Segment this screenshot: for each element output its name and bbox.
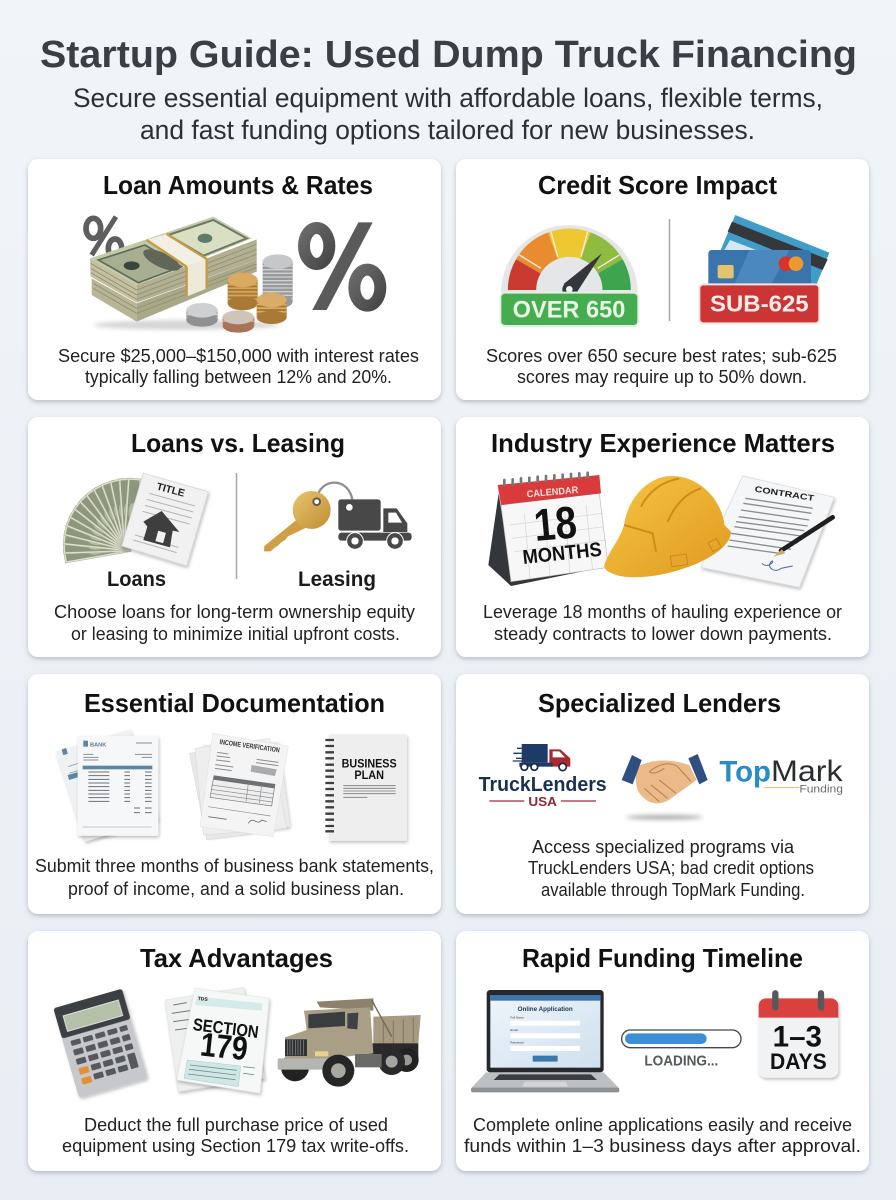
logo: TruckLenders USA: TruckLenders	[479, 774, 607, 796]
text: credit score: Scores over 650 secure best rates; sub-625	[486, 346, 837, 366]
icon: business plan notebook	[325, 734, 407, 841]
icon: business plan notebook: PLAN	[354, 769, 384, 782]
logo: TopMark Funding: Mark	[771, 755, 843, 788]
text: documentation: Submit three months of business bank statements,	[35, 856, 434, 876]
icon: loading bar: LOADING...	[644, 1054, 718, 1070]
subtitle: and fast funding options tailored for new businesses.	[140, 115, 755, 145]
title: Startup Guide: Used Dump Truck Financing	[40, 34, 857, 76]
panel: tax advantages	[28, 931, 441, 1171]
logo: TruckLenders USA: USA	[528, 794, 558, 809]
panel: loans vs leasing	[28, 417, 441, 657]
text: tax advantages: equipment using Section 179 tax write-offs.	[62, 1136, 409, 1156]
icon: laptop with online application: Password	[510, 1041, 524, 1045]
icon: calendar, hard hat and contract: MONTHS	[522, 539, 603, 569]
divider	[668, 219, 670, 321]
heading: loans vs leasing: Loans vs. Leasing	[131, 428, 345, 458]
text: credit score	[486, 346, 837, 387]
text: specialized lenders: TruckLenders USA; bad credit options	[528, 858, 814, 878]
heading: rapid funding: Rapid Funding Timeline	[522, 943, 803, 973]
text: loan amounts: typically falling between 12% and 20%.	[85, 367, 392, 387]
text: specialized lenders	[528, 837, 814, 900]
icon: calendar, hard hat and contract: CALENDAR	[526, 485, 579, 500]
text: specialized lenders: Access specialized programs via	[532, 837, 795, 857]
icon: calendar, hard hat and contract: CONTRACT	[754, 484, 815, 503]
logo: TopMark Funding: Funding	[799, 783, 843, 795]
text: loan amounts	[58, 346, 419, 387]
icon: cash fan and title document: TITLE	[155, 482, 186, 500]
icon: dump truck	[278, 998, 421, 1087]
icon: credit gauge	[500, 225, 638, 326]
text: loans vs leasing: or leasing to minimize initial upfront costs.	[71, 624, 400, 644]
label: leasing: Leasing	[298, 568, 376, 591]
icon: calendar, hard hat and contract: 18	[532, 496, 579, 551]
panel: industry experience	[456, 417, 869, 657]
icon: calendar, hard hat and contract	[488, 473, 834, 587]
icon: section 179 tax form	[165, 987, 269, 1093]
logo: TopMark Funding: Top	[719, 756, 771, 789]
icon: laptop with online application	[471, 990, 619, 1092]
icon: calendar 1-3 days: DAYS	[770, 1049, 827, 1074]
heading: documentation: Essential Documentation	[84, 688, 385, 718]
icon: key and truck	[264, 483, 412, 551]
text: tax advantages	[62, 1115, 409, 1156]
panel: rapid funding timeline	[456, 931, 869, 1171]
icon: laptop with online application: Online Application	[518, 1006, 573, 1013]
logo: TopMark Funding	[719, 755, 843, 795]
icon: laptop with online application: Full Name	[510, 1016, 524, 1020]
text: documentation: proof of income, and a solid business plan.	[68, 879, 404, 899]
text: documentation	[35, 856, 434, 899]
logo: TruckLenders USA	[479, 744, 607, 809]
text: specialized lenders: available through TopMark Funding.	[541, 880, 805, 900]
icon: bank statements: BANK	[90, 742, 107, 748]
text: industry experience: Leverage 18 months of hauling experience or	[483, 602, 842, 622]
subtitle	[73, 83, 823, 145]
subtitle: Secure essential equipment with affordable loans, flexible terms,	[73, 83, 823, 113]
text: industry experience	[483, 602, 842, 644]
icon: money, coins and percent signs	[86, 217, 380, 333]
panel: credit score impact	[456, 159, 869, 400]
heading: tax advantages: Tax Advantages	[140, 943, 333, 973]
text: credit score: scores may require up to 50% down.	[517, 367, 807, 387]
heading: credit score: Credit Score Impact	[538, 170, 777, 200]
divider	[236, 473, 238, 579]
heading: industry experience: Industry Experience Matters	[491, 428, 835, 458]
icon: income verification: INCOME VERIFICATION	[219, 739, 280, 754]
text: industry experience: steady contracts to lower down payments.	[494, 624, 832, 644]
icon: calendar 1-3 days	[759, 993, 838, 1078]
icon: credit cards with sub-625 label	[699, 215, 829, 323]
text: rapid funding: funds within 1–3 business days after approval.	[464, 1136, 861, 1156]
heading: specialized lenders: Specialized Lenders	[538, 688, 781, 718]
icon: handshake	[622, 754, 708, 820]
icon: laptop with online application: Email	[510, 1028, 518, 1032]
icon: credit cards with sub-625 label: SUB-625	[710, 291, 809, 317]
heading: loan amounts: Loan Amounts & Rates	[103, 170, 373, 200]
panel: loan amounts and rates	[28, 159, 441, 400]
panel: essential documentation	[28, 674, 441, 914]
text: loans vs leasing: Choose loans for long-term ownership equity	[54, 602, 415, 622]
panel: specialized lenders	[456, 674, 869, 914]
text: tax advantages: Deduct the full purchase price of used	[84, 1115, 388, 1135]
icon: business plan notebook: BUSINESS	[342, 758, 397, 771]
icon: section 179 tax form: SECTION	[192, 1014, 260, 1042]
icon: income verification	[189, 733, 290, 840]
icon: section 179 tax form: TDS	[197, 996, 209, 1003]
icon: section 179 tax form: 179	[198, 1026, 249, 1068]
label: loans: Loans	[107, 568, 166, 591]
icon: calculator	[53, 989, 148, 1098]
icon: bank statements	[56, 729, 158, 842]
icon: calendar 1-3 days: 1–3	[773, 1021, 822, 1054]
text: rapid funding: Complete online applications easily and receive	[473, 1115, 852, 1135]
text: rapid funding	[464, 1115, 861, 1156]
icon: loading bar	[622, 1030, 741, 1070]
icon: cash fan and title document	[63, 473, 208, 566]
text: loans vs leasing	[54, 602, 415, 644]
text: loan amounts: Secure $25,000–$150,000 with interest rates	[58, 346, 419, 366]
icon: credit gauge: OVER 650	[513, 296, 625, 323]
